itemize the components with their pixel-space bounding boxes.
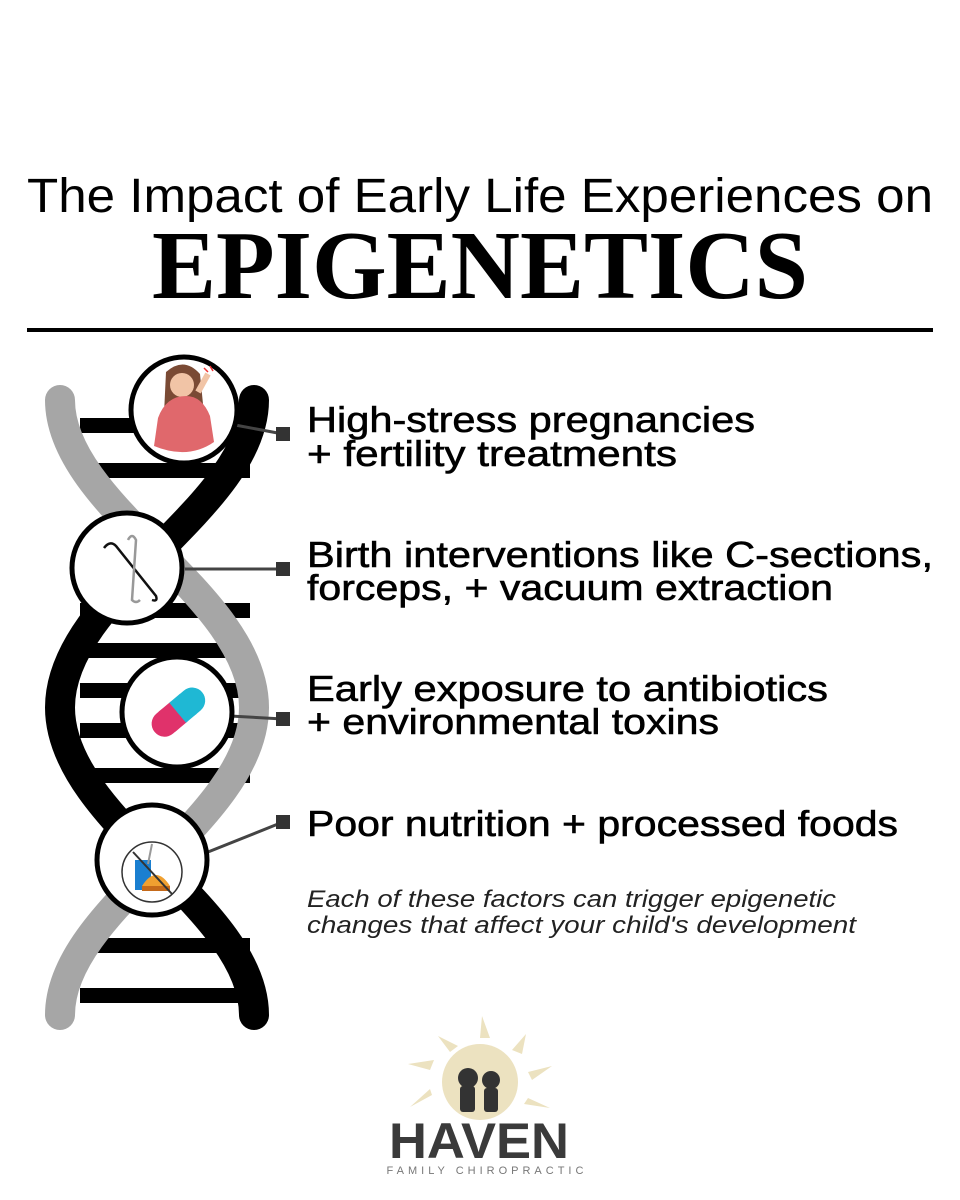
dna helix — [60, 400, 254, 1015]
logo: haven family chiropractic: HAVEN — [389, 1113, 569, 1169]
italic note: Each of these factors can trigger epigenetic — [307, 886, 836, 913]
text: item 2: Birth interventions like C-sections, — [307, 534, 933, 575]
icon: forceps — [72, 513, 182, 623]
text: item 2 — [307, 534, 933, 608]
logo: haven family chiropractic: FAMILY CHIROPRACTIC — [387, 1165, 587, 1177]
text: item 3: Early exposure to antibiotics — [307, 668, 828, 709]
text: item 4: Poor nutrition + processed foods — [307, 803, 898, 844]
title — [27, 170, 933, 320]
title: EPIGENETICS — [152, 212, 808, 320]
logo: haven family chiropractic — [387, 1016, 587, 1177]
text: item 3: + environmental toxins — [307, 701, 719, 742]
text: item 1: + fertility treatments — [307, 433, 677, 474]
title: The Impact of Early Life Experiences on — [27, 170, 933, 223]
text: item 2: forceps, + vacuum extraction — [307, 567, 833, 608]
icon: pregnant woman — [131, 357, 237, 463]
connector lines — [185, 425, 290, 852]
italic note: changes that affect your child's development — [307, 912, 858, 939]
text: item 1: High-stress pregnancies — [307, 399, 755, 440]
text: item 1 — [307, 399, 755, 474]
icon: pill capsule — [122, 657, 232, 767]
icon: no junk food — [97, 805, 207, 915]
text: item 3 — [307, 668, 828, 742]
italic note — [307, 886, 858, 939]
